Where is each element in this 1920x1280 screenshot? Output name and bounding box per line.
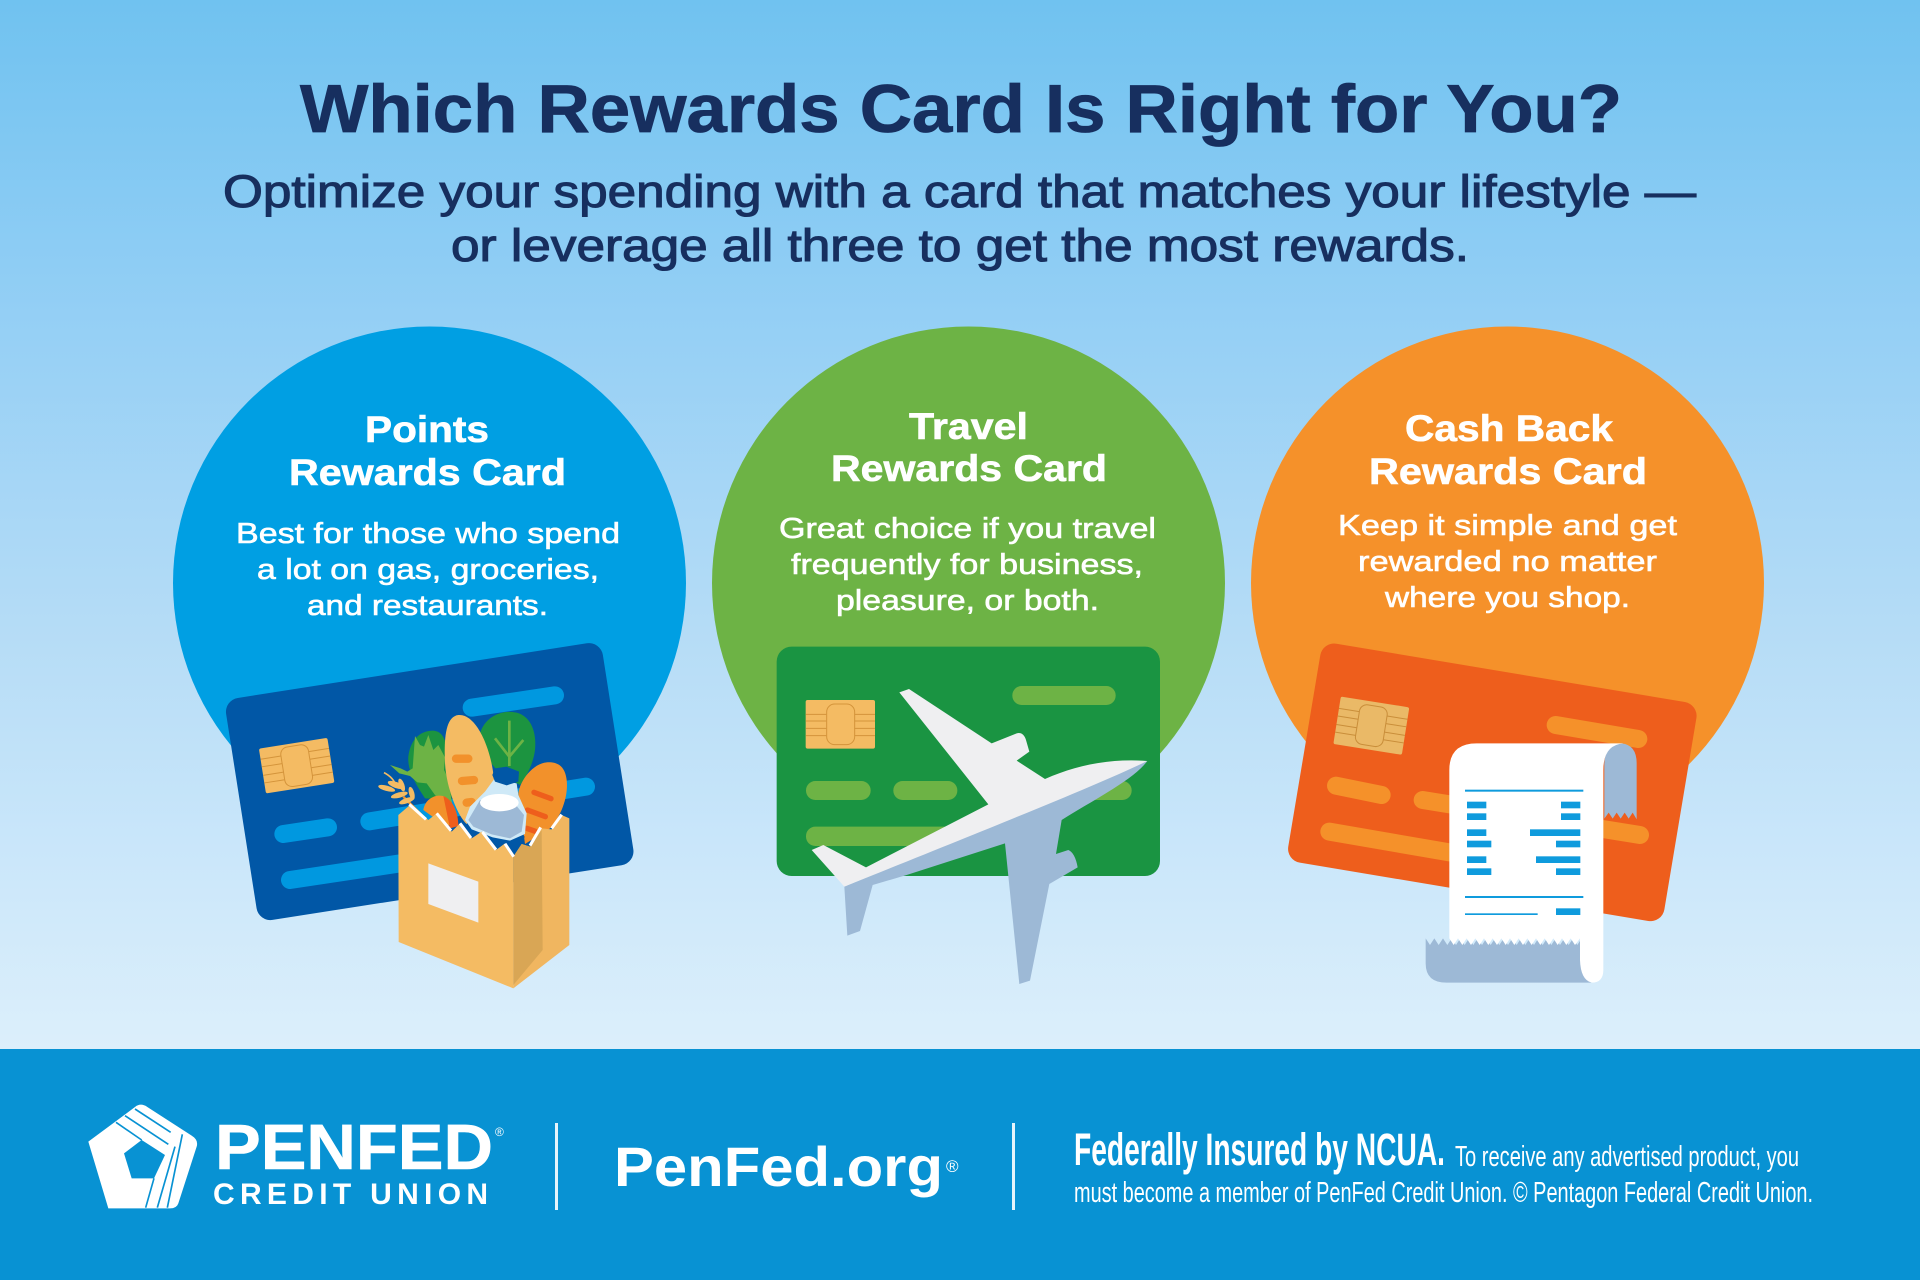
bag fold: [513, 830, 543, 985]
logo text: PENFED: [215, 1111, 493, 1183]
illustration: receipt: [1426, 743, 1637, 983]
receipt paper: [1449, 743, 1623, 983]
subtitle: [223, 166, 1696, 271]
panel: cash back rewards card: [1251, 326, 1764, 983]
divider: [1012, 1123, 1015, 1210]
heading: points: Points: [365, 409, 489, 450]
text: points description: [236, 518, 620, 622]
heading: points: [289, 409, 566, 493]
website: ®: [946, 1157, 959, 1176]
bag back panel: [513, 815, 569, 988]
text: cash back description: [1338, 510, 1677, 614]
illustration: grocery bag: [378, 712, 569, 988]
footer band: [0, 1049, 1920, 1280]
logo text: CREDIT UNION: [213, 1178, 488, 1211]
orange bread: [518, 762, 567, 844]
receipt lines: [1465, 790, 1583, 915]
bag torn white edges: [409, 804, 562, 857]
divider: [555, 1123, 558, 1210]
heading: cash back: [1369, 408, 1647, 492]
text: cash back description: where you shop.: [1384, 582, 1630, 614]
icon: penfed logo mark: [88, 1105, 197, 1208]
disclosure text: [1074, 1124, 1813, 1209]
baguette: [445, 715, 494, 824]
panel: travel rewards card: [712, 326, 1225, 984]
subtitle: Optimize your spending with a card that matches your lifestyle —: [223, 166, 1696, 217]
bag label: [428, 863, 478, 923]
carrot greens: [390, 731, 453, 810]
text: travel description: Great choice if you travel: [779, 513, 1156, 545]
illustration: blue credit card: [224, 641, 635, 922]
text: cash back description: Keep it simple and get: [1338, 510, 1677, 542]
logo text: ®: [495, 1125, 504, 1139]
title: Which Rewards Card Is Right for You?: [300, 71, 1622, 147]
website: PenFed.org: [614, 1135, 943, 1198]
heading: travel: Travel: [909, 406, 1028, 447]
illustration: green credit card: [777, 647, 1160, 876]
wheat: [378, 773, 423, 817]
circle: cash back: [1251, 326, 1764, 840]
bag front: [398, 805, 513, 988]
spinach leaf: [480, 712, 535, 785]
icon: chip: [1333, 697, 1409, 755]
illustration: airplane: [812, 689, 1147, 984]
heading: travel: Rewards Card: [831, 448, 1107, 489]
text: points description: a lot on gas, groceries,: [257, 554, 599, 586]
text: travel description: pleasure, or both.: [836, 585, 1099, 617]
plane top: [812, 689, 1147, 887]
text: points description: Best for those who spend: [236, 518, 620, 550]
carrots: [423, 796, 458, 828]
heading: cash back: Rewards Card: [1369, 451, 1647, 492]
panel: points rewards card: [173, 326, 686, 988]
icon: chip: [259, 738, 334, 793]
illustration: orange credit card: [1286, 641, 1699, 923]
disclosure text: Federally Insured by NCUA.: [1074, 1124, 1445, 1175]
subtitle: or leverage all three to get the most rewards.: [451, 220, 1469, 271]
heading: travel: [831, 406, 1107, 489]
milk bottle: [465, 767, 527, 850]
footer: [0, 1049, 1920, 1280]
heading: cash back: Cash Back: [1405, 408, 1613, 449]
text: travel description: [779, 513, 1156, 617]
logo text: [213, 1111, 504, 1211]
text: cash back description: rewarded no matter: [1358, 546, 1657, 578]
header: [223, 71, 1696, 271]
circle: points: [173, 326, 686, 840]
text: points description: and restaurants.: [307, 590, 548, 622]
text: travel description: frequently for business,: [791, 549, 1143, 581]
receipt bottom curl: [1426, 938, 1592, 983]
heading: points: Rewards Card: [289, 452, 566, 493]
icon: chip: [806, 700, 875, 749]
receipt back curl: [1604, 743, 1637, 819]
plane underside: [844, 761, 1147, 984]
circle: travel: [712, 326, 1225, 840]
